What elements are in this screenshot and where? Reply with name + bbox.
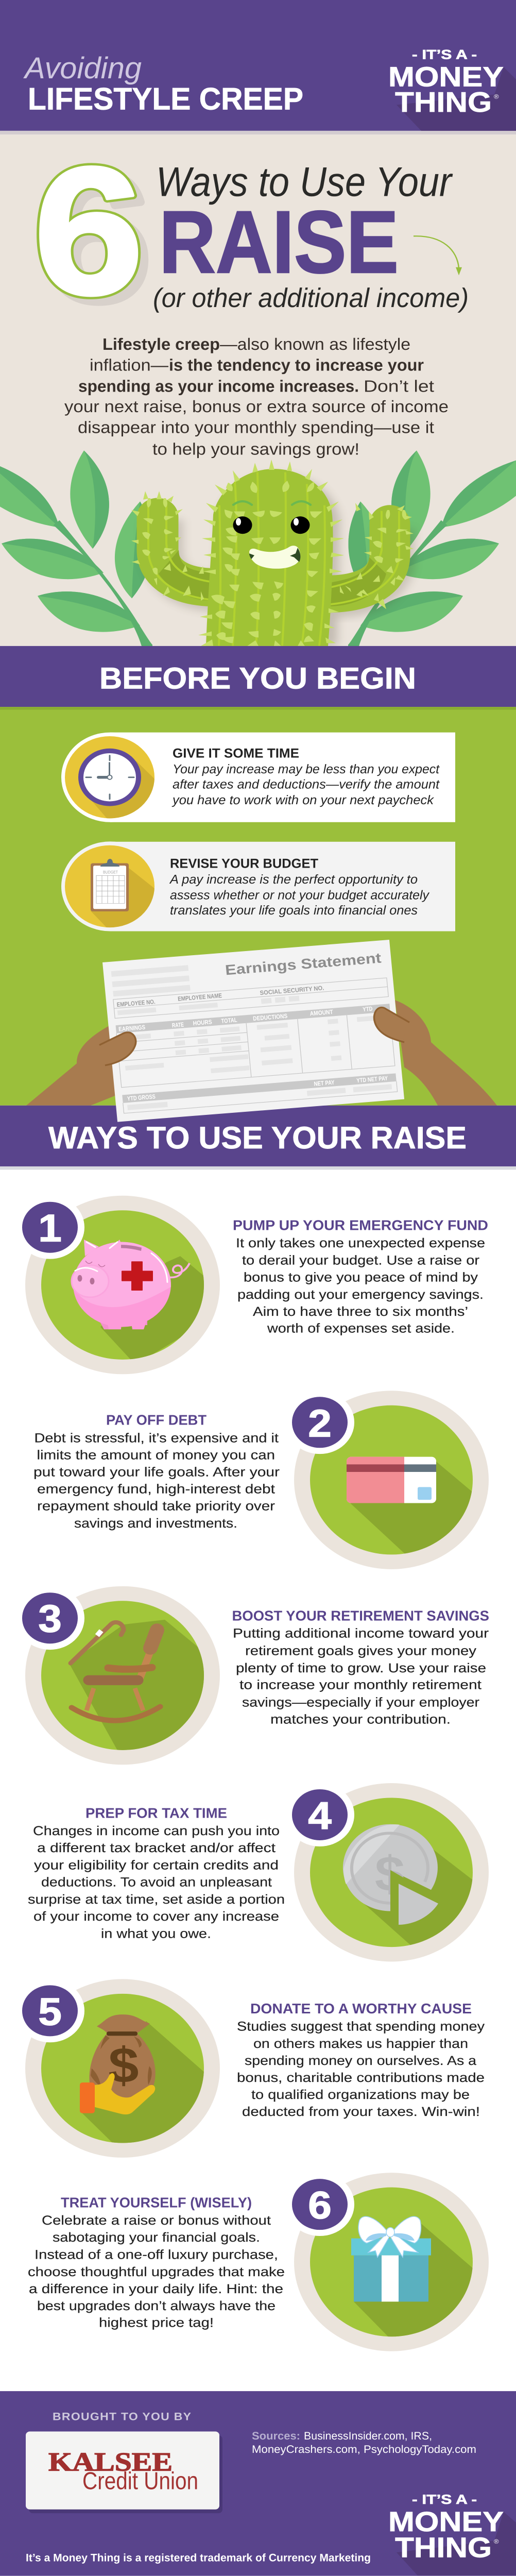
footer logo: It's a Money Thing: ® [494,2538,499,2545]
way 2: pay off debt: limits the amount of money you can [37,1447,275,1462]
earnings statement [102,940,404,1122]
card: revise your budget [61,841,455,933]
way 4: tax time: PREP FOR TAX TIME [85,1806,227,1821]
earnings statement: YTD [363,1005,373,1013]
header title [23,51,303,116]
way 5: donate: spending money on ourselves. As a [245,2053,477,2068]
footer logo: It's a Money Thing: MONEY [388,2506,504,2537]
way 5: donate: on others makes us happier than [253,2036,468,2050]
header title: LIFESTYLE CREEP [28,81,303,116]
sponsor logo: Kalsee Credit Union [26,2432,222,2513]
way 6: treat yourself: choose thoughtful upgrades that make [28,2264,285,2279]
way 1: emergency fund: Aim to have three to six months’ [253,1304,468,1319]
main title [153,158,469,313]
logo: It's a Money Thing: MONEY [388,61,504,93]
arms behind statement [26,1000,497,1106]
way 6: treat yourself: Instead of a one-off luxury purchase, [35,2247,278,2262]
way 4: tax time: of your income to cover any increase [33,1909,279,1923]
ways to use your raise band: WAYS TO USE YOUR RAISE [48,1120,467,1155]
big number 6: 6 [41,135,151,339]
way 2: pay off debt: Debt is stressful, it’s expensive and it [34,1431,279,1445]
way 2: pay off debt: PAY OFF DEBT [106,1413,207,1428]
way 6: treat yourself: a difference in your daily life. Hint: the [29,2281,283,2296]
earnings statement: DEDUCTIONS [253,1012,288,1022]
way 2: pay off debt: put toward your life goals. After your [33,1464,280,1479]
card: give it some time [61,733,455,831]
earnings statement: SOCIAL SECURITY NO. [260,984,324,996]
footer band [0,2391,516,2576]
way 1: emergency fund: PUMP UP YOUR EMERGENCY FUND [233,1218,488,1233]
icon: clock [78,749,141,806]
way 5: donate: deducted from your taxes. Win-win! [242,2104,480,2119]
way 6: treat yourself: sabotaging your financial goals. [53,2230,260,2245]
icon: coin with slice [343,1824,438,1925]
intro panel background [0,134,516,646]
way 6: treat yourself [28,2173,489,2351]
icon: credit card [347,1457,436,1503]
way 2: pay off debt: 2 [308,1402,332,1445]
earnings statement: EARNINGS [118,1024,146,1032]
intro paragraph: your next raise, bonus or extra source of income [64,398,449,416]
footer logo: It's a Money Thing: THING [395,2532,492,2563]
leaves left [0,450,152,646]
way 6: treat yourself: TREAT YOURSELF (WISELY) [61,2195,252,2211]
earnings statement: Earnings Statement [225,951,382,978]
earnings statement: EMPLOYEE NO. [116,998,156,1008]
intro paragraph: Don’t let [364,377,434,396]
way 4: tax time: surprise at tax time, set aside a portion [28,1892,285,1906]
footer logo: It's a Money Thing [388,2492,504,2563]
card: revise your budget: translates your life goals into financial ones [170,903,418,918]
icon: coin with slice: $ [375,1846,405,1902]
header title: Avoiding [23,51,142,85]
intro paragraph: is the tendency to increase your [169,356,424,375]
green panel [0,707,516,1106]
way 4: tax time: 4 [308,1794,332,1837]
sponsor logo: Kalsee Credit Union: Credit Union [82,2467,198,2495]
card: give it some time: Your pay increase may be less than you expect [173,762,440,776]
intro paragraph: spending as your income increases. [78,377,359,396]
card: give it some time: GIVE IT SOME TIME [173,746,299,760]
way 1: emergency fund [15,1196,488,1374]
card: give it some time: you have to work with on your next paycheck [171,793,434,807]
intro paragraph: Lifestyle creep [102,335,220,354]
trademark note: It’s a Money Thing is a registered trademark of Currency Marketing [26,2551,371,2564]
brought to you by: BROUGHT TO YOU BY [53,2410,191,2422]
way 5: donate: DONATE TO A WORTHY CAUSE [250,2001,472,2016]
way 3: retirement savings [15,1586,489,1775]
intro paragraph: disappear into your monthly spending—use it [78,418,434,437]
logo: It's a Money Thing [388,47,504,118]
way 4: tax time: a different tax bracket and/or affect [37,1840,276,1855]
before you begin band [0,646,516,707]
way 3: retirement savings: matches your contribution. [270,1712,451,1726]
icon: gift box [351,2216,431,2301]
way 2: pay off debt: repayment should take priority over [37,1498,275,1513]
earnings statement: YTD GROSS [127,1093,156,1102]
way 5: donate: 5 [38,1990,62,2033]
icon: money bag in hand: $ [109,2038,139,2093]
icon: rocking chair and cane [71,1622,160,1721]
earnings statement: TOTAL [221,1016,237,1025]
earnings statement: RATE [171,1021,184,1029]
way 1: emergency fund: 1 [38,1207,62,1250]
way 3: retirement savings: to increase your monthly retirement [239,1677,481,1692]
footer logo: It's a Money Thing: - IT’S A - [412,2492,477,2506]
sources: Sources: [252,2430,300,2442]
main title: Ways to Use Your [156,158,453,205]
icon: clipboard [91,859,129,911]
sponsor logo: Kalsee Credit Union: KALSEE [48,2448,173,2477]
way 4: tax time [28,1783,489,1962]
cactus [131,460,414,646]
sources: MoneyCrashers.com, PsychologyToday.com [252,2443,476,2455]
before you begin band: BEFORE YOU BEGIN [99,661,416,695]
main title: RAISE [159,193,399,292]
way 2: pay off debt [34,1391,489,1569]
way 1: emergency fund: worth of expenses set aside. [267,1321,455,1335]
way 4: tax time: Changes in income can push you into [33,1823,280,1838]
earnings statement: EMPLOYEE NAME [178,992,222,1003]
way 5: donate [15,1979,485,2172]
way 4: tax time: deductions. To avoid an unpleasant [41,1874,272,1889]
card: revise your budget: REVISE YOUR BUDGET [170,856,318,871]
way 2: pay off debt: emergency fund, high-interest debt [37,1482,275,1496]
way 3: retirement savings: savings—especially if your employer [242,1695,479,1709]
way 5: donate: to qualified organizations may be [251,2087,470,2102]
leaves right [348,450,516,646]
earnings statement: HOURS [193,1018,212,1027]
way 4: tax time: in what you owe. [101,1926,211,1941]
way 1: emergency fund: bonus to give you peace of mind by [244,1270,478,1284]
icon: money bag in hand [80,2014,156,2114]
way 3: retirement savings: BOOST YOUR RETIREMENT SAVINGS [232,1608,489,1624]
way 1: emergency fund: to derail your budget. Use a raise or [242,1253,479,1267]
way 4: tax time: your eligibility for certain credits and [34,1857,279,1872]
header band [0,0,516,134]
way 3: retirement savings: plenty of time to grow. Use your raise [236,1660,486,1675]
way 6: treat yourself: Celebrate a raise or bonus without [42,2213,271,2228]
way 5: donate: Studies suggest that spending money [237,2019,485,2033]
ways to use your raise band [0,1106,516,1170]
icon: piggy bank [72,1240,190,1329]
way 3: retirement savings: Putting additional income toward your [233,1626,489,1640]
card: give it some time: after taxes and deductions—verify the amount [173,777,440,791]
intro paragraph: —also known as lifestyle [220,335,410,354]
intro paragraph [64,335,449,459]
card: revise your budget: assess whether or not your budget accurately [170,888,429,902]
earnings statement: YTD NET PAY [356,1075,388,1084]
way 3: retirement savings: retirement goals gives your money [245,1643,476,1658]
way 5: donate: bonus, charitable contributions made [237,2070,485,2085]
way 1: emergency fund: It only takes one unexpected expense [236,1235,485,1250]
way 6: treat yourself: best upgrades don’t always have the [37,2298,276,2313]
arrow [414,236,462,275]
way 6: treat yourself: highest price tag! [99,2315,214,2330]
logo: It's a Money Thing: ® [494,93,499,100]
logo: It's a Money Thing: THING [395,87,492,118]
way 1: emergency fund: padding out your emergency savings. [237,1287,484,1301]
earnings statement: NET PAY [314,1079,335,1088]
way 3: retirement savings: 3 [38,1598,62,1640]
earnings statement: AMOUNT [309,1008,333,1017]
way 2: pay off debt: savings and investments. [74,1516,237,1531]
big number 6: 6 [33,129,144,332]
sources [252,2430,476,2455]
icon: clipboard: BUDGET [103,870,118,875]
big number 6: 6 [33,129,144,332]
intro paragraph: inflation— [90,356,168,375]
way 6: treat yourself: 6 [308,2184,332,2227]
intro paragraph: to help your savings grow! [152,440,359,459]
card: revise your budget: A pay increase is the perfect opportunity to [169,872,418,886]
sources: BusinessInsider.com, IRS, [304,2430,432,2442]
main title: (or other additional income) [153,283,469,313]
thumbs over statement [99,1007,409,1065]
logo: It's a Money Thing: - IT’S A - [412,47,477,62]
